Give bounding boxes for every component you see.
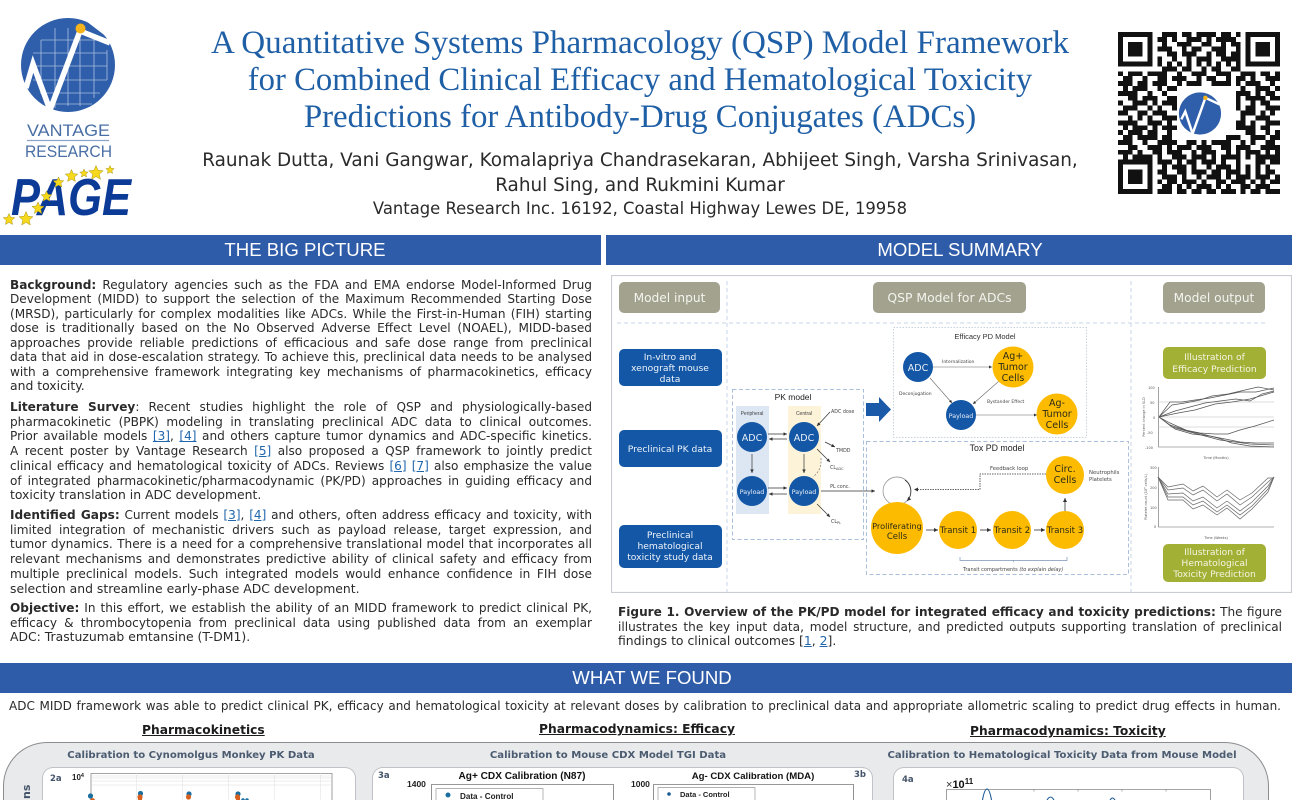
chart: efficacy prediction: 100 [1148, 386, 1155, 390]
tox PD model: Transit 2 [993, 526, 1030, 536]
section header: what we found: WHAT WE FOUND [572, 667, 732, 688]
text block: literature survey: Literature Survey: Recent studies highlight the role of QSP and physiologically-based [10, 400, 592, 414]
chart: efficacy prediction: -50 [1147, 431, 1153, 435]
input: preclinical hematological toxicity study data [619, 525, 722, 568]
chart: efficacy prediction: -100 [1145, 446, 1153, 450]
input: preclinical PK data [619, 430, 722, 467]
chart: efficacy prediction: 50 [1150, 401, 1154, 405]
text block: background: with a comprehensive framework integrating key mechanisms of pharmacokinetics, efficacy [10, 365, 592, 379]
input: preclinical hematological toxicity study data: hematological [637, 541, 703, 552]
tox PD model: Transit 1 [939, 526, 976, 536]
tox PD model: Neutrophils [1089, 470, 1120, 476]
text block: background: approaches provide reliable predictions of efficacious and safe dose range from preclinical [10, 336, 592, 350]
input: preclinical PK data: Preclinical PK data [628, 444, 712, 455]
affiliation: Vantage Research Inc. 16192, Coastal Highway Lewes DE, 19958 [373, 199, 907, 218]
logo: Vantage Research [21, 18, 115, 161]
text block: background: dose is traditionally based on the No Observed Adverse Effect Level (NOAEL), MIDD-based [10, 321, 592, 335]
output: toxicity prediction label: Illustration of [1184, 547, 1246, 558]
PK model: PK model [775, 392, 812, 402]
chart card 3 [372, 767, 873, 800]
PK model: CL [831, 520, 837, 525]
header: QSP model [873, 282, 1026, 313]
PK model [732, 390, 875, 540]
header: model output: Model output [1174, 291, 1255, 305]
section header: the big picture [0, 235, 601, 265]
text block: objective: Objective: In this effort, we establish the ability of an MIDD framework to predict clinical PK, [10, 601, 592, 615]
input: preclinical hematological toxicity study data: toxicity study data [627, 552, 713, 563]
efficacy PD model: Cells [1002, 373, 1024, 384]
chart 4a: hematological toxicity: 11 [965, 777, 974, 786]
figure caption: findings to clinical outcomes [1, 2]. [618, 633, 836, 648]
chart 3b: Ag- CDX calibration: 3b [854, 770, 866, 780]
heading: pharmacodynamics toxicity: Pharmacodynamics: Toxicity [970, 724, 1166, 738]
heading: pharmacokinetics: Pharmacokinetics [142, 723, 265, 737]
PK model: ADC [836, 467, 844, 471]
text block: background: Development (MIDD) to support the selection of the Maximum Recommended Starting Dose [10, 292, 592, 306]
tox PD model [866, 442, 1128, 574]
chart 2a: PK data: 2a [50, 774, 62, 784]
PK model: Peripheral [741, 411, 763, 417]
chart: toxicity prediction: 200 [1150, 486, 1157, 490]
logo: Vantage Research: RESEARCH [25, 143, 112, 161]
tox PD model: Proliferating [872, 521, 922, 531]
logo: Vantage Research: VANTAGE [27, 122, 110, 140]
output: toxicity prediction label: Hematological [1181, 558, 1248, 569]
text block: identified gaps: Identified Gaps: Current models [3], [4] and others, often address efficacy and toxicity, with [10, 508, 592, 522]
subheading: hematological toxicity: Calibration to Hematological Toxicity Data from Mouse Model [887, 750, 1237, 761]
text block: literature survey: of integrated pharmacokinetic/pharmacodynamic (PK/PD) approaches in guiding efficacy and [10, 474, 592, 488]
chart: toxicity prediction: 300 [1150, 466, 1157, 470]
text block: objective: ADC: Trastuzumab emtansine (T-DM1). [10, 629, 250, 644]
text block: literature survey: Prior available models [3], [4] and others capture tumor dynamics and ADC-specific kinetics. [10, 429, 592, 443]
PK model: ADC [742, 433, 763, 444]
text block: identified gaps: limited integration of mechanistic drivers such as payload release, target expression, and [10, 523, 592, 537]
section header: model summary [606, 235, 1292, 265]
text block: background: Background: Regulatory agencies such as the FDA and EMA endorse Model-Informed Drug [10, 278, 592, 292]
heading: pharmacodynamics efficacy: Pharmacodynamics: Efficacy [539, 722, 735, 736]
authors: Rahul Sing, and Rukmini Kumar [495, 175, 785, 196]
output: efficacy prediction label: Efficacy Prediction [1172, 364, 1257, 375]
text block: literature survey [10, 400, 592, 502]
figure 1: model diagram [611, 275, 1292, 593]
output: efficacy prediction label: Illustration of [1184, 352, 1246, 363]
efficacy PD model: Ag- [1049, 398, 1065, 409]
PK model: PL conc. [830, 484, 850, 490]
efficacy PD model: Tumor [997, 362, 1028, 373]
text block: identified gaps: selection and streamline early-phase ADC development. [10, 580, 360, 596]
text block: objective [10, 601, 592, 644]
tox PD model: Cells [1054, 475, 1076, 486]
chart 3a: Ag+ CDX calibration: 1400 [407, 779, 426, 789]
efficacy PD model: Payload [949, 413, 973, 420]
input: in-vitro and xenograft mouse data [619, 349, 722, 386]
text block: literature survey: pharmacokinetic (PBPK) modeling in translating preclinical ADC data to clinical outcomes. [10, 415, 592, 429]
PK model: CL [830, 466, 836, 471]
output: toxicity prediction label: Toxicity Prediction [1172, 569, 1256, 580]
tox PD model: Cells [887, 532, 908, 542]
text block: identified gaps: multiple preclinical models. Such integrated models would enhance confidence in FIH dose [10, 567, 592, 581]
tox PD model: Feedback loop [990, 466, 1029, 472]
text block: identified gaps: tumor dynamics. There is a need for a comprehensive translational model that incorporates all [10, 537, 592, 551]
section header: what we found [0, 663, 1292, 693]
PK model: TMDD [835, 448, 851, 454]
text block: background: and toxicity. [10, 378, 85, 393]
chart 3a: Ag+ CDX calibration: Ag+ CDX Calibration (N87) [458, 771, 586, 782]
tox PD model: Transit compartments (to explain delay) [962, 567, 1063, 573]
input: in-vitro and xenograft mouse data: data [660, 374, 680, 385]
text block: literature survey: clinical efficacy and hematological toxicity of ADCs. Reviews [6] [7] also emphasize the value [10, 459, 592, 473]
text block: objective: efficacy & thrombocytopenia from preclinical data using published data from an exemplar [10, 616, 592, 630]
text block: identified gaps: relevant mechanisms and demonstrates predictive ability of clinical safety and efficacy from [10, 552, 592, 566]
results panel [3, 742, 1269, 800]
title: Predictions for Antibody-Drug Conjugates (ADCs) [304, 99, 976, 135]
header: model output [1163, 282, 1265, 313]
chart: efficacy prediction: Percent change in SLD [1142, 397, 1146, 437]
chart 2a: PK data: 10 [72, 773, 81, 782]
efficacy PD model: Deconjugation [899, 391, 932, 397]
authors [202, 150, 1078, 196]
input: in-vitro and xenograft mouse data: In-vitro and [644, 352, 696, 363]
efficacy PD model: Cells [1046, 420, 1068, 431]
efficacy PD model: Efficacy PD Model [954, 332, 1016, 341]
chart: toxicity prediction: Time (Weeks) [1203, 536, 1229, 540]
chart 2a: PK data: 4 [81, 773, 85, 779]
chart 3a: Ag+ CDX calibration [378, 771, 614, 800]
QR code [1118, 32, 1280, 194]
chart 3b: Ag- CDX calibration: Ag- CDX Calibration (MDA) [692, 771, 814, 782]
text block: background: data that aid in dose-escalation strategy. To achieve this, preclinical data needs to be analysed [10, 350, 592, 364]
chart: efficacy prediction: 0 [1153, 416, 1155, 420]
figure caption [618, 605, 1282, 648]
text block: background [10, 278, 592, 393]
chart 3b: Ag- CDX calibration: 1000 [631, 779, 650, 789]
text block: literature survey: toxicity translation in ADC development. [10, 487, 261, 502]
chart: toxicity prediction: 0 [1154, 525, 1156, 529]
text block: background: (MRSD), particularly for complex modalities like ADCs. While the First-in-Human (FIH) starting [10, 306, 592, 320]
PK model: PL [837, 521, 841, 525]
summary sentence: ADC MIDD framework was able to predict clinical PK, efficacy and hematological toxicity at relevant doses by calibration to preclinical data and appropriate allometric scaling to predict drug effects in human. [9, 699, 1281, 713]
chart 4a: hematological toxicity: 4a [902, 775, 914, 785]
tox PD model: Circ. [1054, 464, 1076, 475]
text block: literature survey: A recent poster by Vantage Research [5] also proposed a QSP framework to jointly predict [10, 444, 592, 458]
chart: efficacy prediction [1142, 386, 1274, 460]
chart 3a: Ag+ CDX calibration: 3a [378, 771, 390, 781]
arrow: PK to PD [866, 397, 891, 422]
title [211, 25, 1070, 135]
header: model input [619, 282, 720, 313]
header: model input: Model input [634, 291, 706, 305]
PK model: ADC [794, 433, 815, 444]
efficacy PD model: ADC [908, 363, 929, 374]
chart 3b: Ag- CDX calibration: Data - Control [680, 790, 730, 799]
chart card 2a [42, 767, 356, 800]
title: A Quantitative Systems Pharmacology (QSP) Model Framework [211, 25, 1069, 61]
authors: Raunak Dutta, Vani Gangwar, Komalapriya Chandrasekaran, Abhijeet Singh, Varsha Srinivasan, [202, 150, 1078, 171]
PK model: Payload [740, 489, 764, 496]
output: toxicity prediction label [1163, 544, 1266, 582]
chart: toxicity prediction: 100 [1150, 506, 1157, 510]
header: QSP model: QSP Model for ADCs [887, 290, 1012, 305]
chart 2a: PK data [50, 773, 332, 800]
section header: the big picture: THE BIG PICTURE [224, 239, 386, 260]
chart card 4a [893, 767, 1244, 800]
chart: toxicity prediction: Platelet count (10⁹ cells/L) [1144, 473, 1148, 520]
PK model: ADC dose [831, 409, 854, 415]
chart 4a: hematological toxicity [902, 775, 1211, 800]
input: in-vitro and xenograft mouse data: xenograft mouse [631, 363, 709, 374]
figure caption: Figure 1. Overview of the PK/PD model for integrated efficacy and toxicity predictions: The figure [618, 605, 1282, 619]
text block: identified gaps [10, 508, 592, 596]
PK model: Payload [792, 489, 816, 496]
chart 4a: hematological toxicity: ×10 [946, 779, 965, 791]
title: for Combined Clinical Efficacy and Hematological Toxicity [248, 62, 1032, 98]
section header: model summary: MODEL SUMMARY [877, 239, 1043, 260]
input: preclinical hematological toxicity study data: Preclinical [647, 530, 693, 541]
PK model: Central [796, 411, 812, 417]
subheading: monkey PK: Calibration to Cynomolgus Monkey PK Data [67, 750, 315, 761]
efficacy PD model [894, 328, 1086, 438]
subheading: mouse CDX: Calibration to Mouse CDX Model TGI Data [490, 750, 726, 761]
chart: toxicity prediction [1144, 466, 1274, 540]
efficacy PD model: Bystander Effect [987, 399, 1025, 405]
efficacy PD model: Internalization [942, 359, 974, 365]
efficacy PD model: Tumor [1041, 409, 1072, 420]
chart 3b: Ag- CDX calibration [631, 770, 866, 800]
output: efficacy prediction label [1163, 347, 1266, 379]
tox PD model: Tox PD model [970, 443, 1024, 453]
figure caption: illustrates the key input data, model structure, and predicted outputs supporting translation of preclinical [618, 620, 1282, 634]
tox PD model: Platelets [1089, 477, 1112, 483]
efficacy PD model: Ag+ [1003, 351, 1023, 362]
chart: efficacy prediction: Time (Months) [1202, 456, 1229, 460]
tox PD model: Transit 3 [1046, 526, 1083, 536]
